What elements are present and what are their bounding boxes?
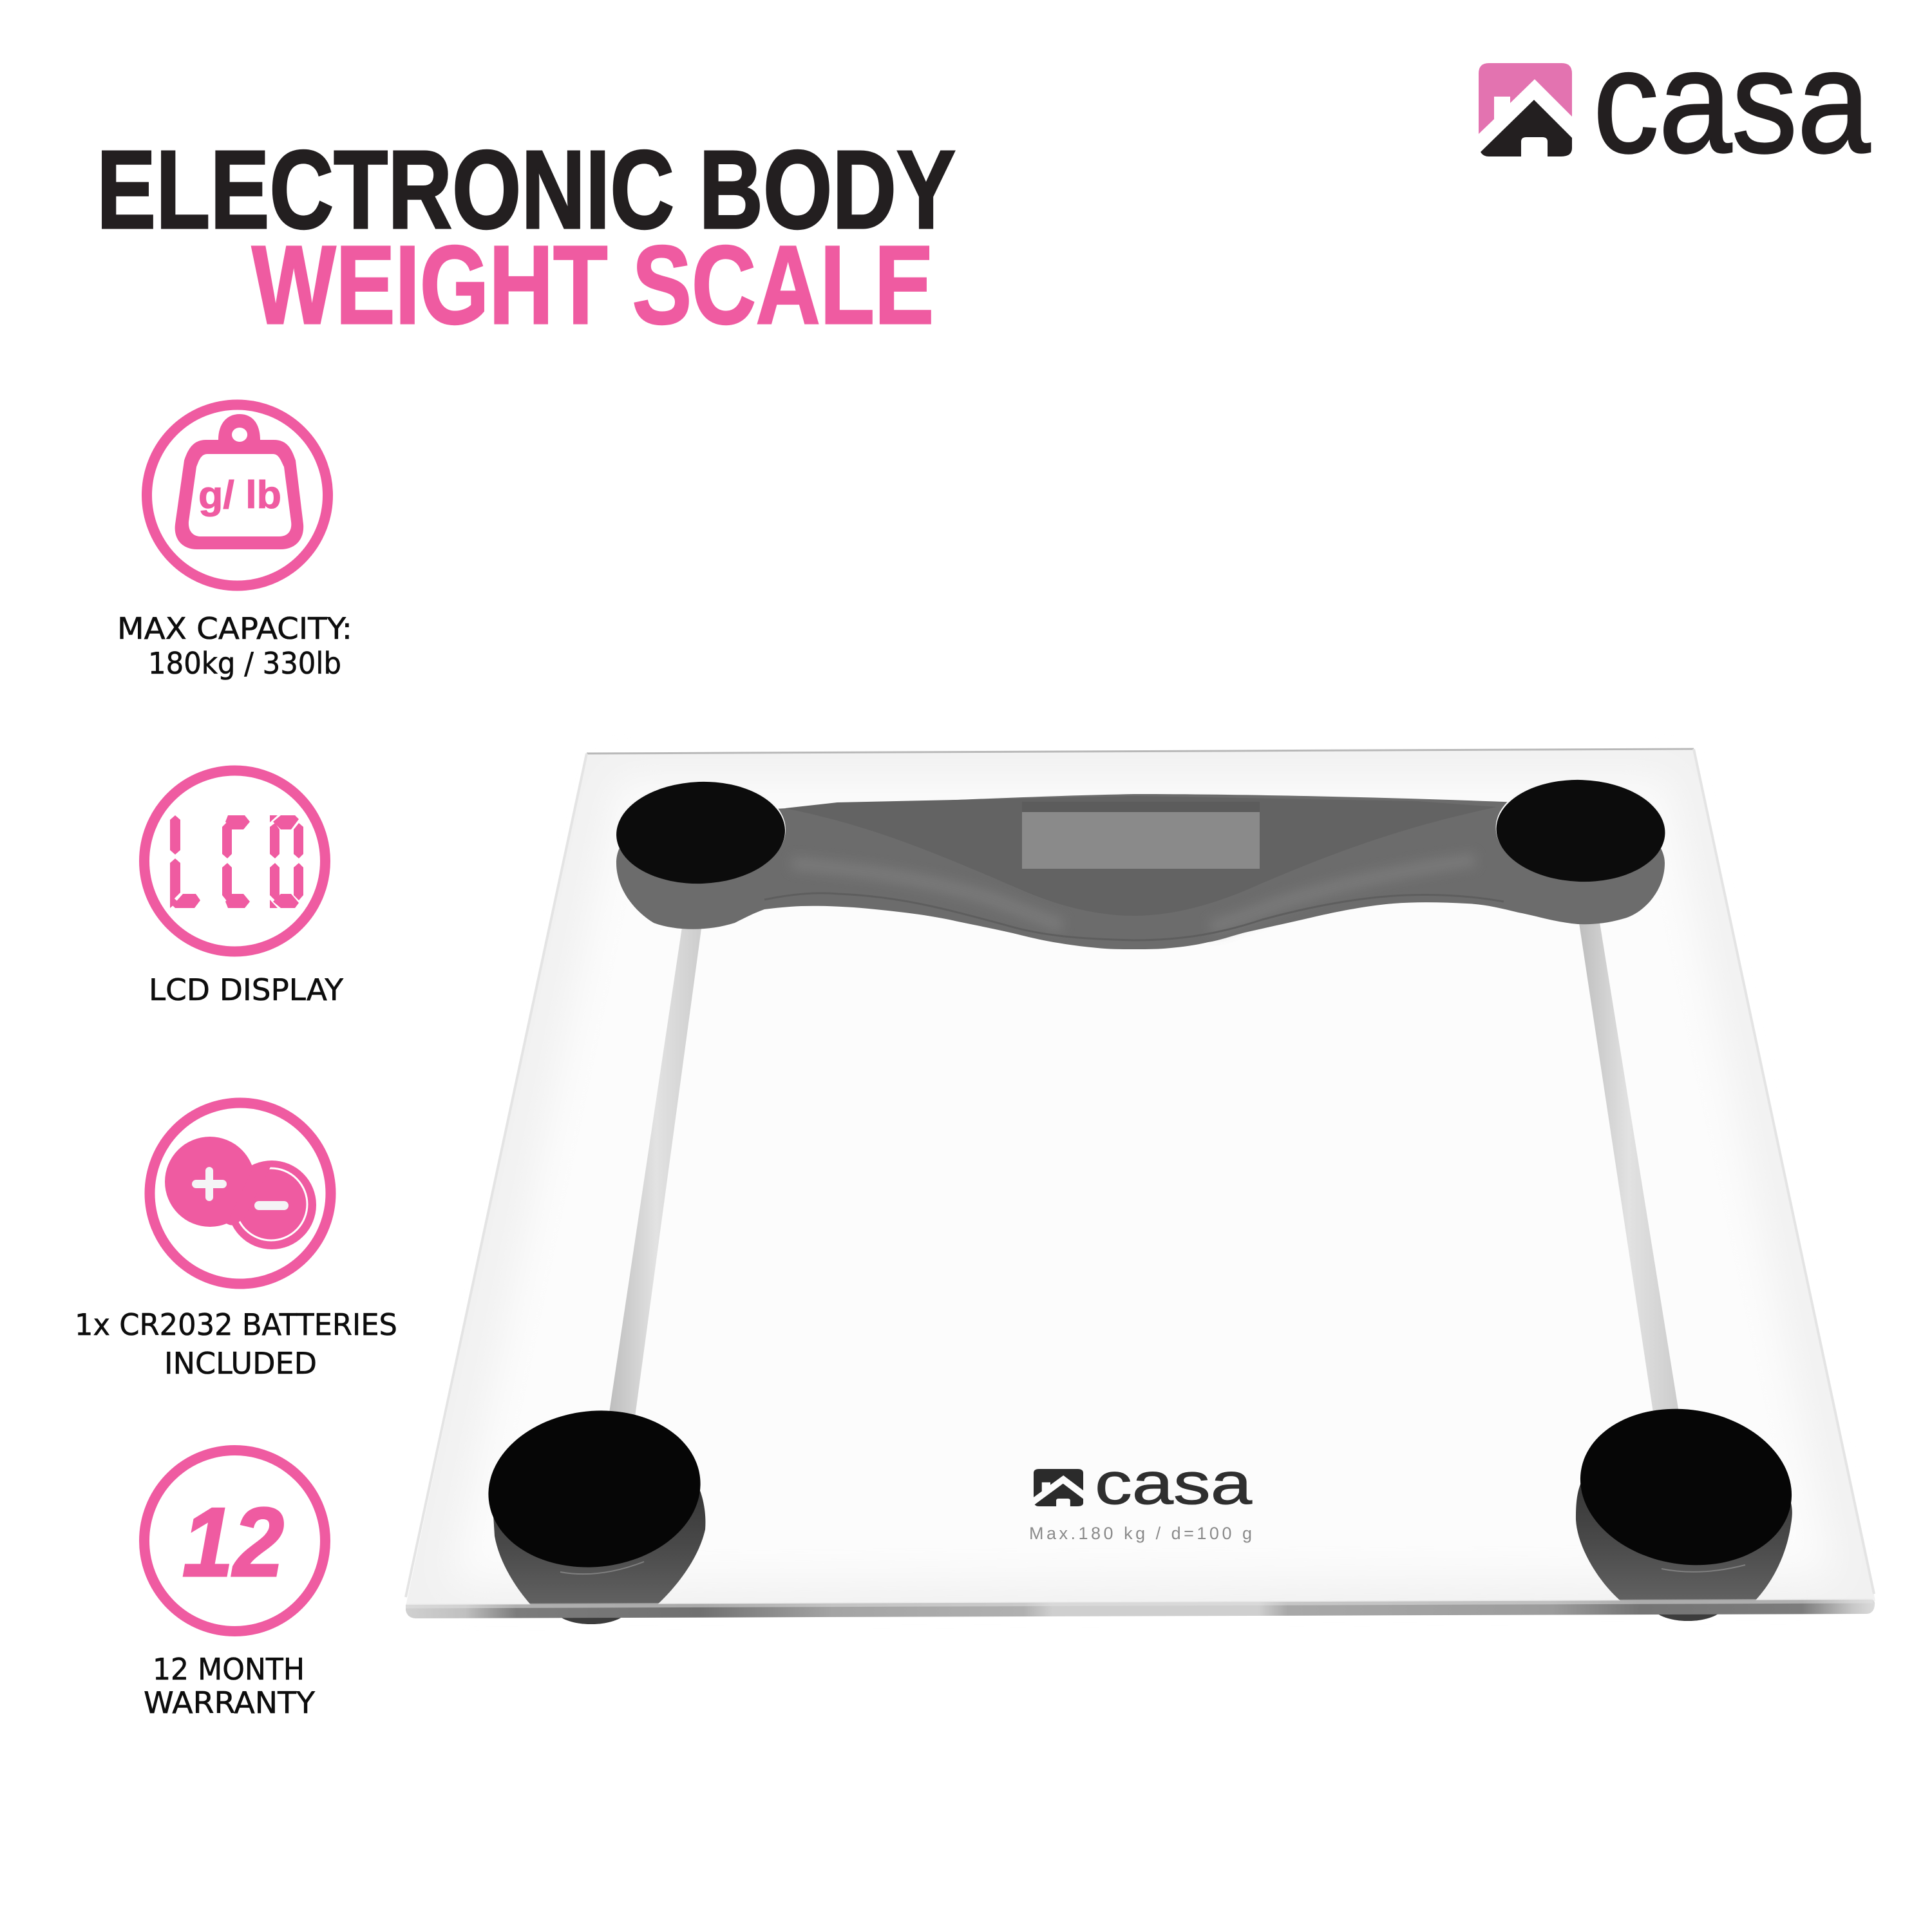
- glass front bevel: [406, 1600, 1875, 1618]
- label: batteries: 1x CR2032 BATTERIES: [75, 1307, 397, 1342]
- label: warranty: [144, 1652, 316, 1720]
- feature: batteries: [75, 1103, 397, 1381]
- icon: 12 months: [144, 1450, 325, 1631]
- logo icon: house: [1479, 63, 1572, 156]
- icon: weight: g/ lb: [198, 473, 281, 516]
- brand logo: [1479, 20, 1870, 184]
- feature: max capacity: [117, 404, 352, 681]
- title line: weight scale: WEIGHT SCALE: [252, 222, 934, 347]
- front foot nubs: [556, 1593, 1723, 1624]
- label: lcd display: LCD DISPLAY: [149, 972, 344, 1007]
- feature: warranty: [144, 1450, 325, 1720]
- rods: [609, 914, 1680, 1417]
- printed logo on glass: [1029, 1451, 1253, 1543]
- label: max capacity: MAX CAPACITY:: [117, 611, 352, 646]
- title line: electronic body: ELECTRONIC BODY: [97, 127, 956, 252]
- label: warranty: WARRANTY: [144, 1685, 316, 1720]
- label: max capacity: 180kg / 330lb: [148, 646, 341, 681]
- lcd window: [1022, 802, 1260, 869]
- icon: lcd: [144, 770, 325, 952]
- front right pad: [1569, 1394, 1803, 1602]
- icon: 12 months: 12: [182, 1488, 284, 1597]
- glass plate: [406, 749, 1875, 1606]
- logo wordmark: casa: [1593, 20, 1870, 184]
- icon: coin batteries: [149, 1103, 331, 1284]
- label: batteries: [75, 1307, 397, 1381]
- product: glass scale: [406, 749, 1875, 1624]
- label: max capacity: [117, 611, 352, 681]
- display housing: [616, 794, 1665, 949]
- front left pad: [480, 1400, 708, 1606]
- back pads: [614, 775, 1667, 887]
- printed capacity text: Max.180 kg / d=100 g: [1029, 1524, 1252, 1543]
- icon: weight: [147, 404, 328, 586]
- label: warranty: 12 MONTH: [153, 1652, 305, 1687]
- title: [97, 127, 956, 347]
- printed wordmark: casa: [1095, 1451, 1253, 1517]
- label: batteries: INCLUDED: [164, 1346, 317, 1381]
- feature: lcd display: [144, 770, 344, 1007]
- printed house mark: [1034, 1469, 1083, 1506]
